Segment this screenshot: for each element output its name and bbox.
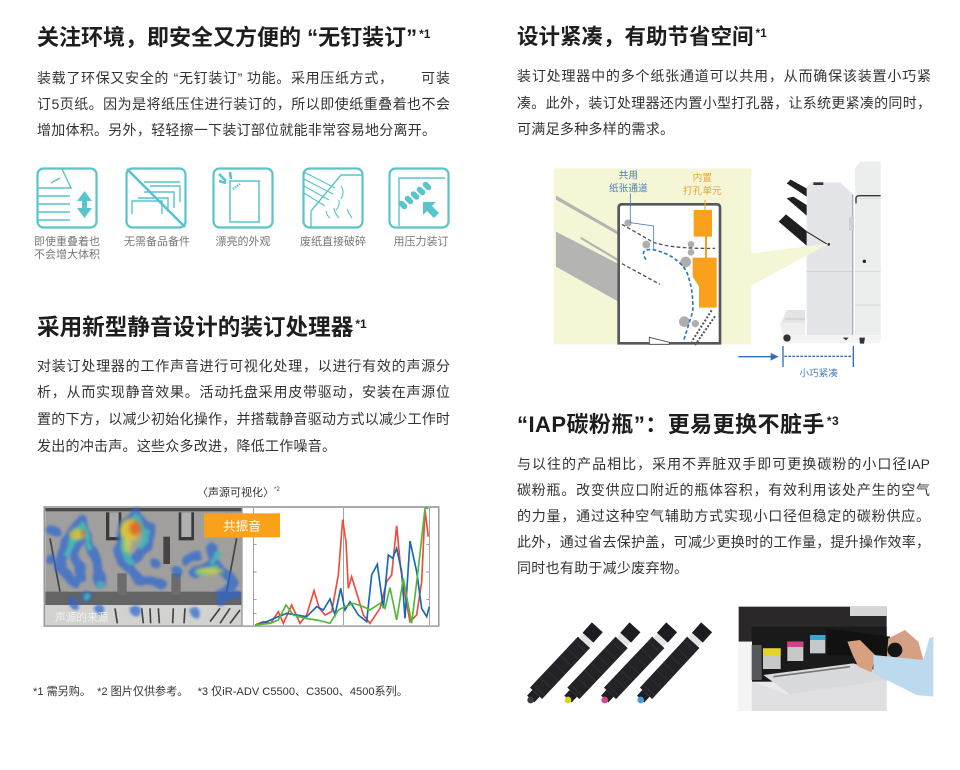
- heading: quiet finisher: 采用新型静音设计的装订处理器*1: [37, 315, 367, 340]
- text block: compact description: [517, 68, 931, 137]
- heading: compact design: 设计紧凑，有助节省空间*1: [517, 25, 767, 49]
- heatmap photo: 声源的来源: [55, 611, 109, 624]
- caption: icon 1: [34, 236, 100, 261]
- caption: icon 2: 无需备品备件: [124, 236, 190, 248]
- label: built-in punch unit: 内置: [693, 172, 712, 184]
- icon: stack without added volume: [38, 168, 96, 228]
- paper paths: [622, 224, 715, 345]
- text block: IAP description: [517, 456, 930, 576]
- chart: sound source heatmap and frequency graph: [44, 506, 440, 627]
- icon row: [36, 167, 450, 229]
- text block: compact description: 可满足多种多样的需求。: [517, 121, 674, 137]
- icon: scrap paper can be shredded: [304, 168, 363, 228]
- panel: quiet finisher: [37, 315, 450, 627]
- panel: compact design: [517, 25, 931, 137]
- text block: staple-free description: [37, 70, 450, 138]
- label: compact: 小巧紧凑: [799, 367, 838, 379]
- caption: icon 1: 即使重叠着也: [34, 236, 100, 248]
- caption: icon 4: 废纸直接破碎: [300, 236, 366, 248]
- frequency graph: [242, 508, 438, 625]
- leader lines: [630, 193, 654, 250]
- text block: quiet finisher description: 对装订处理器的工作声音进行可视化处理，以进行有效的声源分: [37, 358, 450, 374]
- icon: neat appearance: [214, 168, 272, 228]
- finisher interior: [619, 204, 720, 343]
- label: shared paper path: 共用: [619, 171, 638, 182]
- text block: IAP description: 碳粉瓶。改变供应口附近的瓶体容积，有效利用该处产生的空气: [517, 482, 930, 498]
- heatmap photo: [45, 508, 242, 625]
- text block: quiet finisher description: [37, 358, 450, 454]
- diagram: finisher cross-section and machine: [554, 162, 881, 379]
- text block: staple-free description: 增加体积。另外，轻轻擦一下装订部位就能非常容易地分离开。: [37, 122, 436, 138]
- text block: IAP description: 此外，通过省去保护盖，可减少更换时的工作量，提升操作效率，: [517, 534, 930, 550]
- zoom call-out background: [554, 168, 829, 344]
- toner bottles: [527, 627, 707, 703]
- text block: staple-free description: 可装: [421, 70, 450, 86]
- text block: quiet finisher description: 置的下方，以减少初始化操作，并搭载静音驱动方式以减少工作时: [37, 411, 450, 427]
- text block: IAP description: 同时也有助于减少废弃物。: [517, 560, 688, 576]
- label: resonance: 共振音: [223, 518, 261, 533]
- text block: quiet finisher description: 发出的冲击声。这些众多改进，降低工作噪音。: [37, 438, 336, 454]
- panel: IAP toner bottle: [517, 412, 930, 576]
- panel: eco staple-free binding: [34, 25, 450, 261]
- text block: staple-free description: 订5页纸。因为是将纸压住进行装订的，所以即使纸重叠着也不会: [37, 96, 450, 112]
- paper trays: [556, 196, 617, 301]
- text block: staple-free description: 装载了环保又安全的 “无钉装订” 功能。采用压纸方式，: [37, 70, 393, 86]
- toner replacement photo: [739, 607, 933, 711]
- label: resonance: [204, 513, 280, 537]
- caption: icon 1: 不会增大体积: [34, 249, 100, 261]
- text block: quiet finisher description: 析，从而实现静音效果。活动托盘采用皮带驱动，安装在声源位: [37, 384, 450, 400]
- rollers: [624, 219, 699, 327]
- text block: compact description: 凑。此外，装订处理器还内置小型打孔器，让系统更紧凑的同时，: [517, 95, 931, 111]
- label: built-in punch unit: 打孔单元: [683, 185, 722, 197]
- text block: IAP description: 与以往的产品相比，采用不弄脏双手即可更换碳粉的小口径IAP: [517, 456, 930, 472]
- arrow: compact width: [738, 346, 853, 367]
- caption: icon 3: 漂亮的外观: [216, 236, 270, 248]
- heading: staple-free: 关注环境，即安全又方便的 “无钉装订”*1: [37, 25, 430, 50]
- label: shared paper path: 纸张通道: [609, 183, 648, 195]
- text block: compact description: 装订处理器中的多个纸张通道可以共用，从而确保该装置小巧紧: [517, 68, 931, 84]
- chart title: sound visualisation: 〈声源可视化〉*2: [197, 487, 280, 499]
- icon: no spare parts needed: [126, 168, 186, 228]
- footnotes: *1 需另购。 *2 图片仅供参考。 *3 仅iR-ADV C5500、C3500、4500系列。: [33, 686, 408, 698]
- caption: icon 5: 用压力装订: [394, 236, 448, 248]
- text block: IAP description: 的力量，通过这种空气辅助方式实现小口径但稳定的碳粉供应。: [517, 508, 930, 524]
- machine photo: [779, 162, 881, 344]
- punch unit: [693, 210, 717, 308]
- icon: press to bind: [390, 168, 448, 228]
- heading: IAP toner: “IAP碳粉瓶”：更易更换不脏手*3: [517, 412, 839, 437]
